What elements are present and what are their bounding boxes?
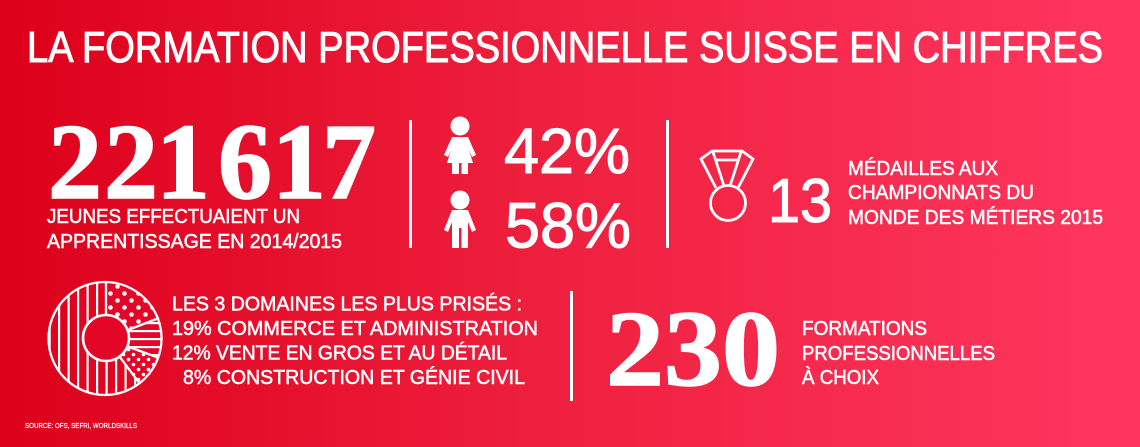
stat: apprentices: APPRENTISSAGE EN 2014/2015 [47,230,342,253]
icon: woman [444,116,476,174]
text: top domains list: 19% COMMERCE ET ADMINISTRATION [172,317,538,340]
stat: programmes: À CHOIX [802,366,879,389]
stat: programmes: PROFESSIONNELLES [802,342,995,365]
chart: domains donut [48,282,163,396]
divider [666,120,669,248]
number: 221 617: 221 617 [0,103,376,222]
text: top domains list [172,292,538,389]
text: top domains list: 8% CONSTRUCTION ET GÉNIE CIVIL [183,366,525,389]
stat: apprentices [0,103,376,253]
stat: programmes [606,290,995,409]
text: top domains list: 12% VENTE EN GROS ET AU DÉTAIL [172,342,507,364]
source: SOURCE: OFS, SEFRI, WORLDSKILLS [25,423,137,430]
stat: gender split [444,115,631,262]
number: 13: 13 [768,167,832,236]
text: 42%: 42% [504,115,630,187]
divider [570,291,573,401]
text: apprentices caption: JEUNES EFFECTUAIENT UN [47,205,300,228]
divider [409,120,412,248]
stat: medals [768,157,1103,236]
icon: medal [701,151,753,220]
icon: man [444,190,476,248]
text: medals caption: MÉDAILLES AUX [848,157,998,180]
text: programmes caption: FORMATIONS [802,317,927,340]
text: top domains list: LES 3 DOMAINES LES PLUS PRISÉS : [172,292,522,316]
stat: medals: CHAMPIONNATS DU [848,181,1034,204]
text: 58%: 58% [505,190,631,262]
number: 230: 230 [606,290,780,409]
stat: medals: MONDE DES MÉTIERS 2015 [848,206,1103,229]
